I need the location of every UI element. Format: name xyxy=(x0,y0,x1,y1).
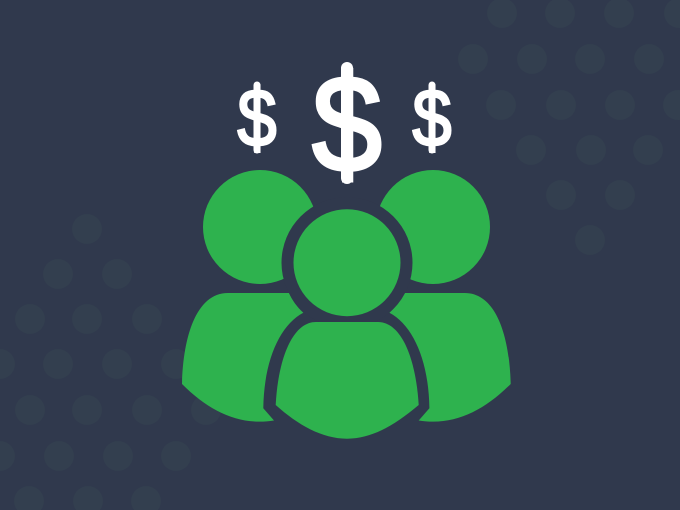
icon: right dollar sign: $ xyxy=(412,73,452,164)
icon: left dollar sign: $ xyxy=(237,73,277,164)
person: left xyxy=(182,170,317,422)
icon: group of three people xyxy=(182,170,511,439)
icon: centre dollar sign: $ xyxy=(312,48,382,200)
person: right xyxy=(376,170,511,422)
dot pattern: top right xyxy=(458,0,680,255)
dot pattern: bottom left xyxy=(0,214,221,510)
person: centre xyxy=(276,197,419,439)
